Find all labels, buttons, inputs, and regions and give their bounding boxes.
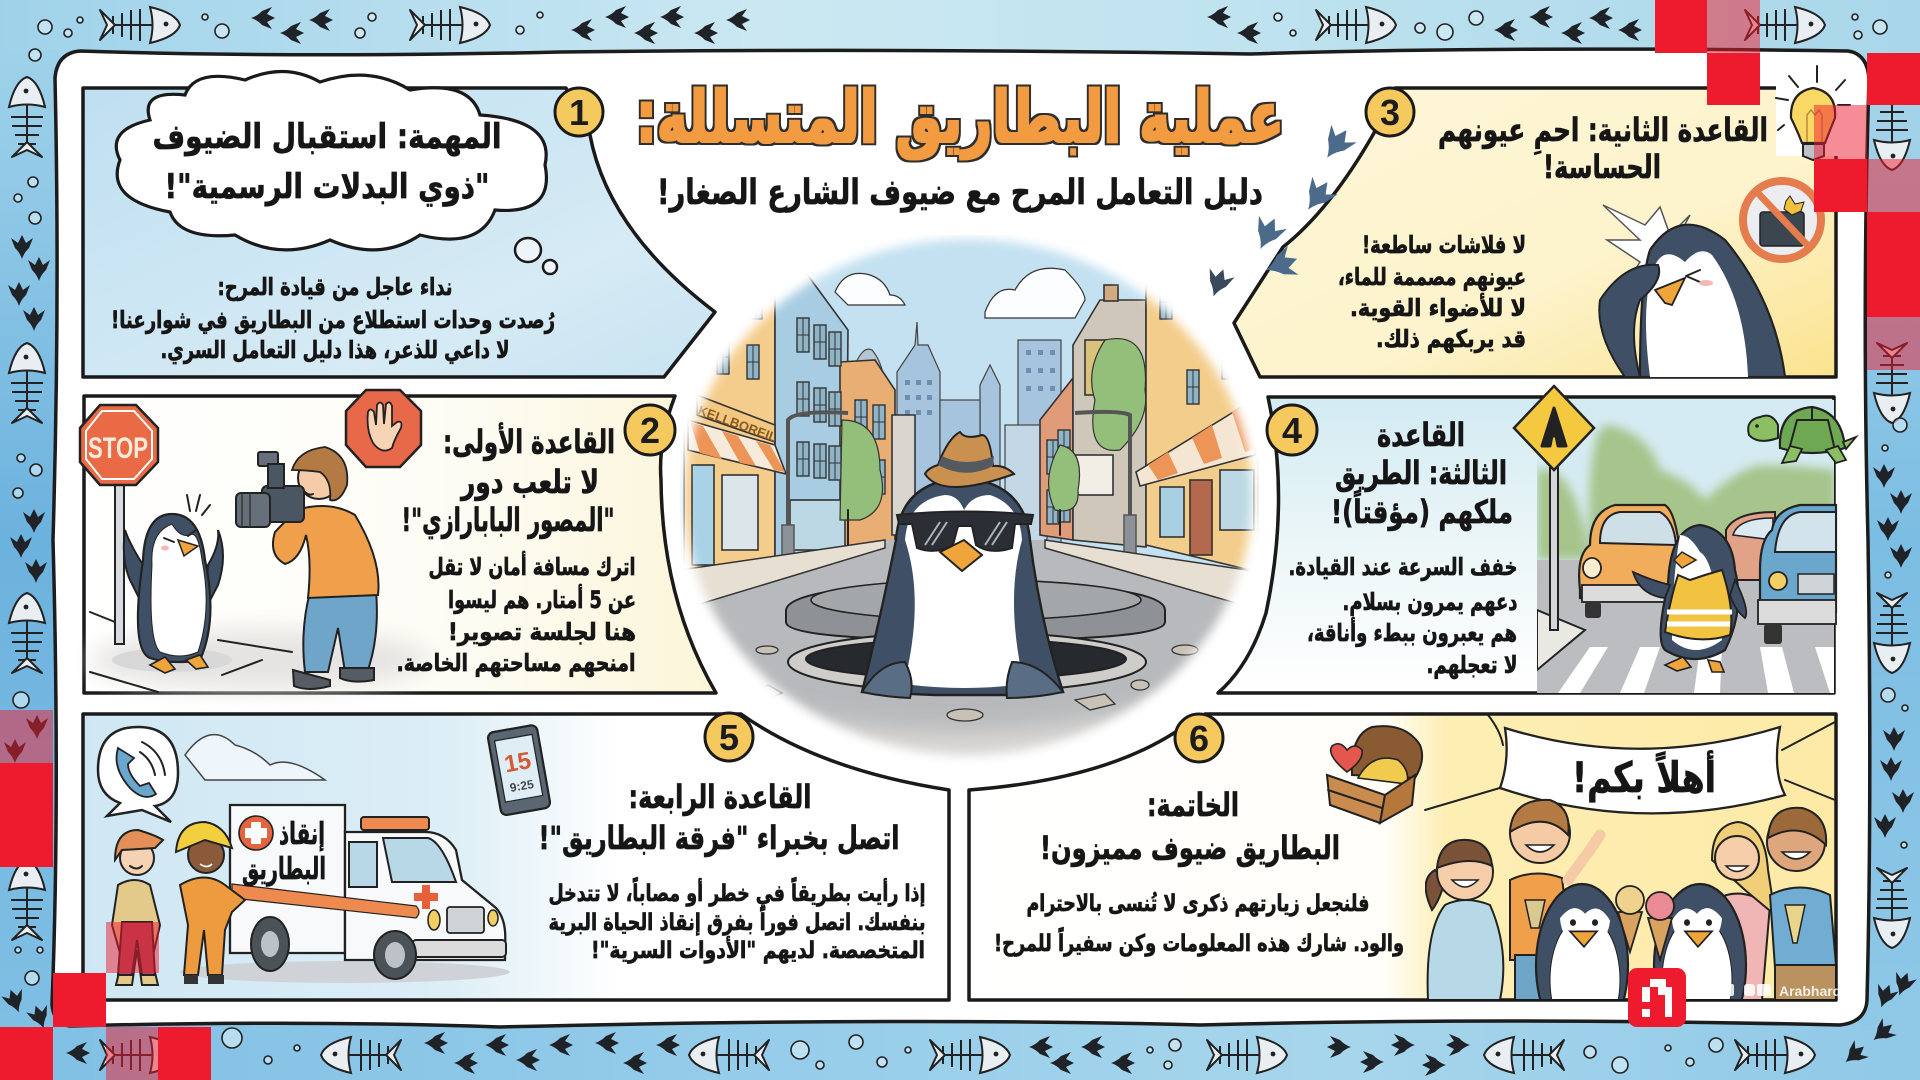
- panel 2 heading: لا تلعب دور: [459, 463, 599, 501]
- panel 3 body text: لا للأضواء القوية.: [1350, 293, 1526, 322]
- badge 5: 5: [719, 717, 739, 758]
- subtitle: دليل التعامل المرح مع ضيوف الشارع الصغار!: [657, 173, 1263, 213]
- stop sign with pole: [80, 405, 158, 644]
- ice creams: [1616, 886, 1674, 960]
- right buildings: [1040, 268, 1258, 572]
- panel 1 body text: نداء عاجل من قيادة المرح:: [218, 273, 452, 301]
- panel 6 body text: والود. شارك هذه المعلومات وكن سفيراً للمرح!: [994, 927, 1404, 957]
- panel 5 heading: اتصل بخبراء "فرقة البطاريق"!: [538, 819, 900, 857]
- panel 2 body text: امنحهم مساحتهم الخاصة.: [396, 649, 636, 677]
- panel 5 body text: [548, 877, 926, 964]
- panel 6 background: [969, 714, 1836, 1000]
- smartphone showing 15: [487, 724, 551, 816]
- turtle: [1748, 407, 1856, 463]
- panel 6 heading: الخاتمة:: [1147, 786, 1239, 824]
- panel 2 heading: "المصور البابارازي"!: [402, 501, 614, 539]
- badge 1: [555, 88, 603, 136]
- panel 4 heading: ملكهم (مؤقتاً)!: [1331, 489, 1513, 531]
- panel 5 heading: القاعدة الرابعة:: [628, 778, 812, 816]
- badge 2: [625, 405, 675, 455]
- man in blue: [1767, 808, 1837, 1005]
- badge 6: [1175, 714, 1223, 762]
- panel 1 heading: [152, 117, 502, 207]
- publisher logo: [1628, 968, 1686, 1027]
- panel 2 background: [84, 396, 716, 693]
- fedora hat: [925, 432, 1014, 487]
- penguin in safety vest: [1633, 525, 1746, 672]
- orange car: [1579, 505, 1682, 618]
- street scene: [1537, 400, 1836, 693]
- camera: [236, 452, 304, 527]
- two penguins: [1534, 882, 1630, 999]
- panel 6 body text: [994, 891, 1404, 957]
- manhole cover: [786, 580, 1165, 640]
- panel 3 body text: قد يربكهم ذلك.: [1376, 325, 1526, 353]
- panel 4: rule three: [1218, 386, 1856, 693]
- sky: [680, 235, 1260, 575]
- phone call bubble: [98, 727, 178, 822]
- panel 3 heading: الحساسة!: [1543, 148, 1661, 186]
- panel 3 heading: القاعدة الثانية: احمِ عيونهم: [1438, 111, 1768, 155]
- badge 4: 4: [1282, 410, 1302, 451]
- hand stop sign: [346, 390, 421, 467]
- street trees: [840, 339, 1146, 555]
- panel 4 body text: هم يعبرون ببطء وأناقة،: [1307, 617, 1517, 647]
- beak: [940, 540, 982, 571]
- angry penguin: [112, 495, 232, 673]
- pavement cracks: [750, 645, 1198, 721]
- panel 4 heading: [1331, 416, 1513, 531]
- smartphone showing 15: 15: [502, 747, 533, 778]
- panel 1 background: [83, 88, 715, 377]
- ambulance label: البطاريق: [242, 852, 326, 887]
- stop sign with pole: STOP: [88, 432, 148, 465]
- distant skyline: [853, 322, 1061, 560]
- panel 1 heading: المهمة: استقبال الضيوف: [152, 117, 502, 157]
- panel 6 heading: البطاريق ضيوف مميزون!: [1040, 829, 1340, 867]
- salmon car: [1726, 512, 1775, 580]
- panel 5 background: [83, 714, 949, 1000]
- panel 3 body text: عيونهم مصممة للماء،: [1338, 263, 1526, 291]
- rescue workers: [112, 822, 245, 985]
- sunglasses: [897, 512, 1033, 551]
- panel 4 background: [1218, 397, 1834, 693]
- panel 6 heading: [1040, 786, 1340, 867]
- panel 5: rule four: [83, 714, 949, 1000]
- left girl: [1426, 840, 1503, 1000]
- main title: عملية البطاريق المتسللة:: [636, 75, 1284, 160]
- social icons and watermark: Arabhard: [1779, 983, 1841, 999]
- sky cloud: [185, 735, 325, 780]
- pavement: [90, 612, 430, 692]
- thought bubbles: [515, 238, 557, 274]
- left buildings: [684, 262, 915, 585]
- light bulb: [1776, 66, 1850, 160]
- ambulance: [180, 805, 510, 983]
- blonde woman: [1712, 822, 1775, 1000]
- panel 1: the mission: [83, 71, 715, 377]
- badge 4: [1267, 405, 1317, 455]
- road: [680, 540, 1260, 770]
- panel 5 heading: [538, 778, 900, 857]
- badge 5: [705, 713, 753, 761]
- panel 1 body text: رُصدت وحدات استطلاع من البطاريق في شوارعنا!: [111, 306, 555, 334]
- badge 2: 2: [640, 410, 660, 451]
- badge 3: [1366, 88, 1414, 136]
- panel 3 background: [1234, 88, 1836, 377]
- manhole opening: [788, 632, 1146, 692]
- panel 3: rule two: [1234, 66, 1850, 377]
- welcome banner: [1425, 715, 1835, 813]
- badge 6: 6: [1189, 718, 1209, 759]
- panel 3 heading: [1438, 111, 1768, 186]
- panel 4 heading: القاعدة: [1377, 416, 1465, 454]
- panel 3 body text: لا فلاشات ساطعة!: [1362, 231, 1526, 259]
- panel 5 body text: المتخصصة. لديهم "الأدوات السرية"!: [591, 935, 925, 964]
- panel 3 body text: [1338, 231, 1526, 353]
- panel 4 body text: دعهم يمرون بسلام.: [1342, 588, 1518, 616]
- panel 4 body text: [1288, 553, 1518, 679]
- ambulance label: [242, 817, 326, 887]
- dazzled penguin: [1599, 225, 1785, 377]
- panel 1 body text: لا داعي للذعر، هذا دليل التعامل السري.: [160, 336, 510, 364]
- smartphone showing 15: 9:25: [509, 777, 535, 795]
- number badges: [555, 88, 1414, 762]
- welcome banner: أهلاً بكم!: [1572, 750, 1716, 802]
- panel 2 body text: اترك مسافة أمان لا تقل: [428, 551, 636, 581]
- ambulance label: إنقاذ: [279, 817, 325, 852]
- footprints trail beside panel 3: [1201, 121, 1359, 301]
- photographer: [273, 447, 379, 689]
- sunglasses penguin: [862, 432, 1063, 698]
- central street scene with penguin in manhole: [680, 235, 1260, 770]
- panel 5 body text: بنفسك. اتصل فوراً بفرق إنقاذ الحياة البرية: [548, 906, 926, 936]
- panel 2: rule one: [80, 390, 716, 693]
- panel 4 body text: خفف السرعة عند القيادة.: [1288, 553, 1518, 581]
- no flash sign: [1743, 181, 1821, 259]
- badge 1: 1: [569, 92, 589, 133]
- badge 3: 3: [1380, 92, 1400, 133]
- blue car: [1758, 505, 1836, 644]
- social icons and watermark: [1724, 983, 1841, 999]
- panel 2 body text: عن 5 أمتار. هم ليسوا: [448, 584, 636, 614]
- crowd with penguins and ice cream: [1425, 798, 1835, 999]
- panel 4 heading: الثالثة: الطريق: [1335, 454, 1507, 492]
- panel 6: conclusion: [967, 712, 1838, 1002]
- panel 2 heading: القاعدة الأولى:: [443, 422, 615, 461]
- panel 5 body text: إذا رأيت بطريقاً في خطر أو مصاباً، لا تتدخل: [548, 877, 926, 907]
- panel 6 body text: فلنجعل زيارتهم ذكرى لا تُنسى بالاحترام: [1026, 891, 1370, 917]
- panel 1 body text: [111, 273, 555, 364]
- panel 1 heading: "ذوي البدلات الرسمية"!: [164, 167, 490, 207]
- street lamps: [782, 412, 1136, 565]
- thought cloud: [116, 71, 546, 250]
- panel 2 heading: [402, 422, 615, 539]
- treasure chest: [1327, 726, 1422, 823]
- boy: [1510, 800, 1600, 1005]
- panel 2 body text: هنا لجلسة تصوير!: [448, 618, 636, 646]
- white corner behind bulb: [1776, 80, 1842, 156]
- panel 2 body text: [396, 551, 636, 677]
- road sign: [1514, 386, 1594, 630]
- flash burst: [1603, 205, 1690, 285]
- panel 4 body text: لا تعجلهم.: [1426, 651, 1518, 679]
- shop sign: KELLBOREIL: [696, 403, 779, 445]
